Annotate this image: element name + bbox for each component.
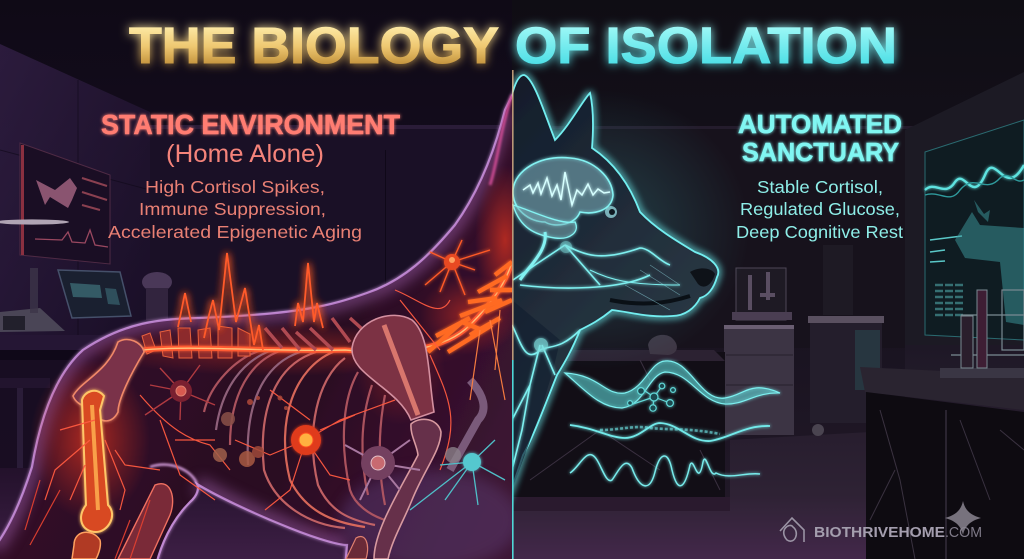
heading	[738, 109, 902, 167]
pink ear edge	[490, 95, 512, 185]
benefits list: Regulated Glucose,	[740, 199, 900, 219]
icon: sparkle	[945, 501, 981, 535]
brain	[513, 158, 613, 280]
background: right laboratory	[512, 0, 1024, 559]
glucose wave: middle ribbon	[570, 423, 770, 441]
center divider line	[512, 70, 514, 559]
neuron: bright orange	[291, 425, 321, 455]
cortisol spike line	[178, 253, 323, 350]
brain EEG trace	[523, 172, 610, 205]
title: gold part: THE BIOLOGY	[129, 17, 499, 74]
dog: right cyan head half	[512, 68, 727, 504]
dog: left red body half	[0, 60, 535, 559]
pelvis and hind leg bones	[72, 340, 173, 559]
heading: STATIC ENVIRONMENT	[101, 109, 400, 140]
background: right marble block and glassware	[860, 290, 1024, 559]
neuron: shoulder orange	[425, 240, 490, 295]
background: left wall screen	[0, 143, 110, 264]
left text block: static environment	[101, 109, 400, 242]
benefits list: Stable Cortisol,	[757, 177, 883, 197]
heading: AUTOMATED	[738, 109, 902, 139]
title	[129, 17, 897, 74]
neuron: lilac	[345, 440, 420, 500]
background: left laboratory	[0, 0, 512, 559]
glucose molecule	[628, 383, 675, 411]
body silhouette	[0, 60, 530, 559]
shoulder blade and foreleg bones	[346, 315, 484, 559]
background: right wall data screen	[925, 120, 1024, 340]
head silhouette	[512, 68, 726, 504]
red glow clouds	[30, 165, 535, 559]
brainwave: lower trace	[570, 455, 760, 486]
watermark: biothrivehome logo	[780, 501, 982, 542]
benefits list: Deep Cognitive Rest	[736, 222, 903, 242]
nerve branches	[25, 290, 505, 559]
heading: SANCTUARY	[742, 137, 899, 167]
watermark: biothrivehome logo: .COM	[945, 525, 982, 541]
effects list: Immune Suppression,	[139, 199, 326, 219]
neuron: cyan	[410, 440, 505, 510]
immune clusters	[213, 396, 288, 467]
effects list	[108, 177, 362, 242]
muzzle details	[605, 206, 715, 310]
right text block: automated sanctuary	[736, 109, 903, 242]
facial nerves	[512, 245, 680, 470]
neck translucent	[512, 300, 560, 490]
icon: house with leaf	[780, 518, 804, 542]
inner lilac rim glow	[0, 110, 505, 548]
benefits list	[736, 177, 903, 242]
glucose wave: top ribbon	[565, 361, 780, 408]
ribs	[204, 350, 385, 528]
wordmark: BIOTHRIVEHOME	[814, 525, 945, 541]
spine	[142, 262, 512, 358]
background: left monitor and lab machine	[0, 268, 172, 332]
subheading: (Home Alone)	[166, 140, 324, 168]
effects list: Accelerated Epigenetic Aging	[108, 222, 362, 242]
title: cyan part: OF ISOLATION	[515, 17, 897, 74]
background: marble counter behind dog	[512, 335, 730, 511]
background: coffee machine and cabinet	[724, 245, 884, 436]
neuron: dim red	[145, 365, 215, 420]
effects list: High Cortisol Spikes,	[145, 177, 325, 197]
